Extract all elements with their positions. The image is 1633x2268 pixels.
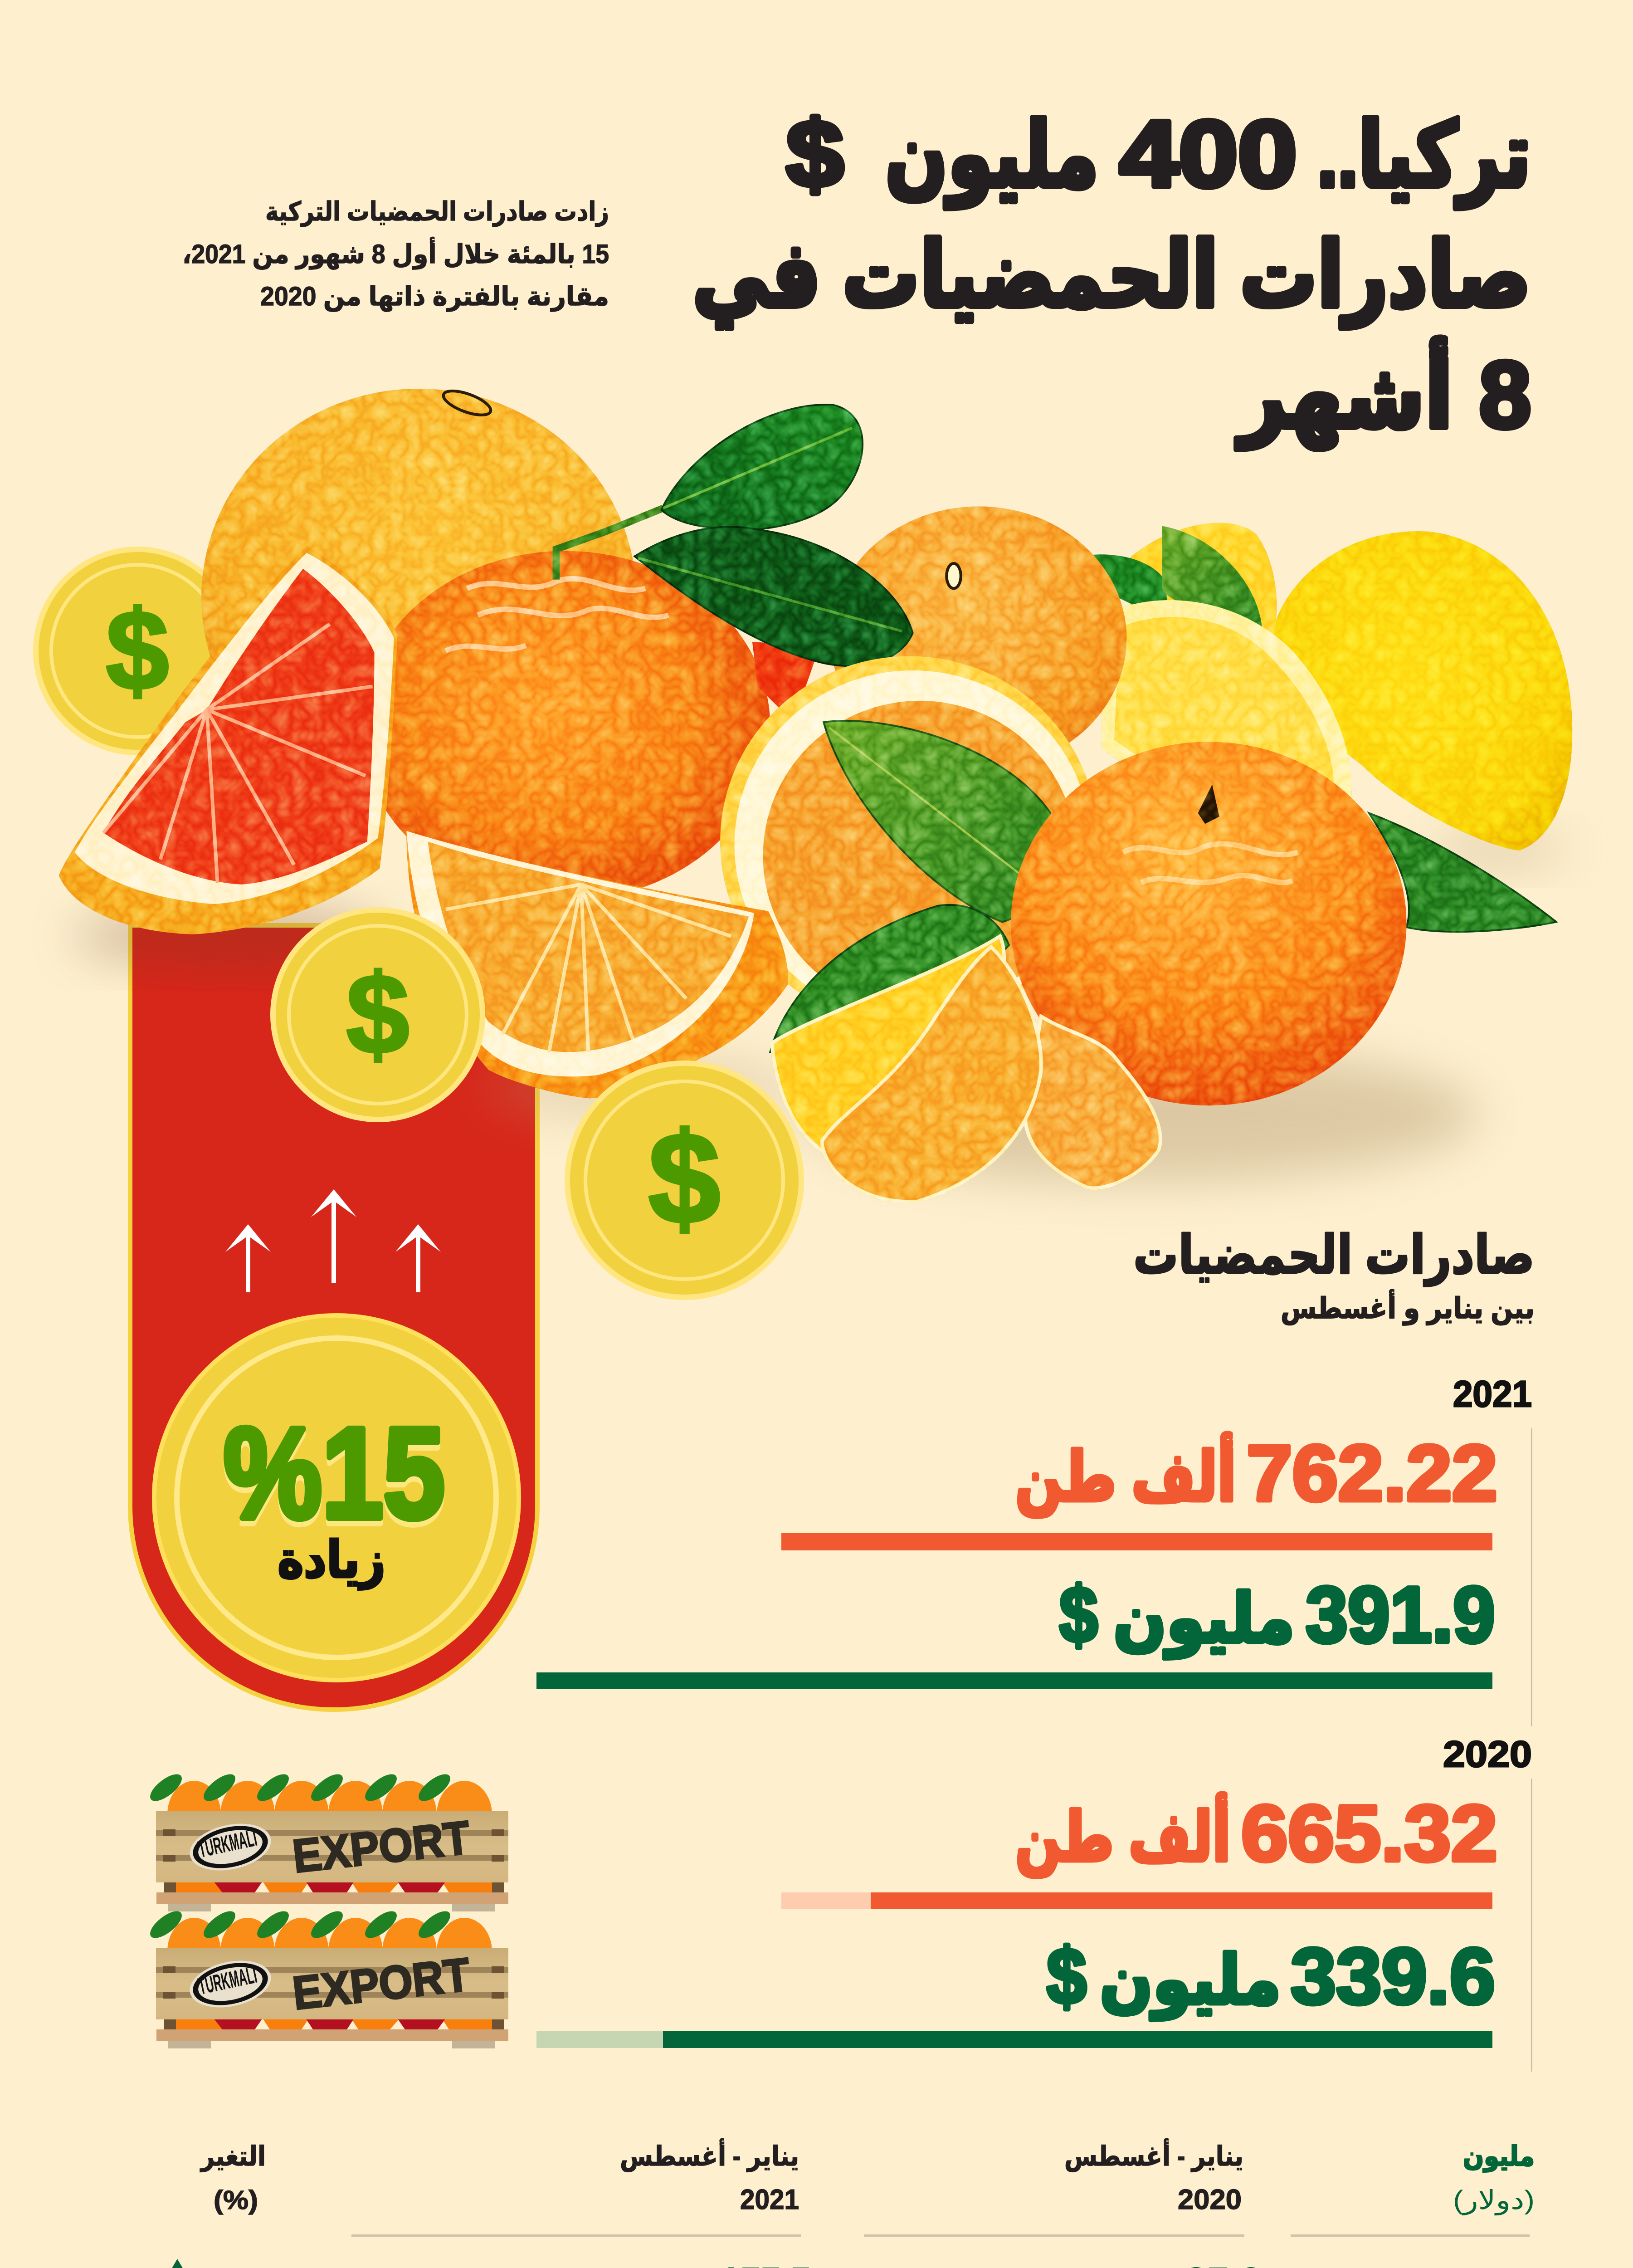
subtitle text block	[182, 197, 609, 312]
panel: 2020 stats: $	[1047, 1932, 1087, 2021]
illustration: citrus fruits	[59, 386, 1572, 1202]
table header: يناير - أغسطس	[1064, 2138, 1243, 2172]
title: مليون	[885, 105, 1099, 209]
icon: coin left	[36, 549, 239, 753]
value bar 2021	[536, 1672, 1492, 1689]
percentage value: %15	[224, 1401, 445, 1545]
tons unit 2021: ألف طن	[1015, 1433, 1236, 1517]
icon: export crate lower: TÜRKMALI	[196, 1962, 259, 2000]
year 2020: 2020	[1443, 1734, 1532, 1775]
row: lemon	[156, 2259, 1530, 2268]
tons bar 2021	[781, 1533, 1492, 1550]
icon: coin lower: $	[648, 1106, 720, 1251]
subtitle text block: ‏15 بالمئة خلال أول 8 شهور من 2021،‏	[182, 237, 609, 270]
arrow middle	[311, 1189, 356, 1283]
big coin: increase	[154, 1315, 519, 1680]
panel: 2021 stats: $	[1059, 1571, 1098, 1659]
fruit: tangerine segment center	[822, 947, 1041, 1202]
increase label: زيادة	[278, 1531, 385, 1589]
icon: export crate upper: EXPORT	[290, 1811, 473, 1882]
leaf: small right	[1162, 526, 1262, 628]
leaf: bottom	[770, 905, 1009, 1052]
leaf: small left	[1073, 554, 1168, 615]
fruit: orange half	[720, 656, 1098, 1027]
title	[692, 102, 1531, 450]
tons value 2020: 665.32	[1241, 1789, 1497, 1878]
fruit: lemon	[1271, 531, 1572, 850]
tons bar 2020	[781, 1892, 1492, 1909]
table header: (دولار)	[1453, 2185, 1535, 2216]
title: 8	[1479, 342, 1531, 448]
table header: (%)	[214, 2185, 258, 2215]
grapefruit stem mark	[440, 386, 493, 420]
fruit: top right orange	[831, 506, 1126, 770]
table header	[200, 2138, 1535, 2237]
icon: coin center	[273, 910, 483, 1119]
table header: 2021	[740, 2184, 799, 2215]
title: تركيا..‏	[1317, 105, 1531, 209]
value 2021: 391.9	[1306, 1571, 1495, 1659]
arrow right	[395, 1224, 441, 1292]
year 2021: 2021	[1453, 1374, 1532, 1415]
icon: coin left: $	[106, 587, 169, 714]
icon: coin center: $	[346, 951, 409, 1077]
icon: coin lower	[567, 1063, 801, 1297]
leaf: right	[1369, 813, 1556, 932]
table header: 2020	[1178, 2184, 1242, 2215]
leaf: center	[824, 721, 1057, 922]
stem	[556, 508, 663, 580]
table header: التغير	[200, 2141, 266, 2172]
title: 400	[1120, 102, 1297, 207]
panel: 2020 stats	[536, 1734, 1532, 2072]
fruit: orange wedge	[406, 831, 788, 1098]
table header: مليون	[1463, 2141, 1535, 2172]
arrows up	[225, 1189, 441, 1292]
panel: 2021 stats	[536, 1374, 1532, 1726]
fruit: lemon half	[1102, 600, 1352, 838]
orange stem mark	[946, 563, 961, 588]
fruit: tangerine segment right	[1025, 1017, 1160, 1188]
arrow left	[225, 1224, 271, 1292]
icon: export crate lower: EXPORT	[290, 1948, 473, 2019]
leaf: top lower	[634, 527, 913, 666]
value bar 2020	[536, 2031, 1492, 2048]
fruit: grapefruit wedge	[59, 546, 398, 934]
section heading: بين يناير و أغسطس	[1281, 1289, 1535, 1325]
value unit 2021: مليون	[1113, 1580, 1295, 1659]
section heading: صادرات الحمضيات	[1133, 1225, 1535, 1286]
table header: يناير - أغسطس	[620, 2138, 799, 2172]
fruit: lemon wedge behind	[1114, 523, 1277, 645]
icon: export crate upper: TÜRKMALI	[196, 1825, 259, 1863]
section heading	[1133, 1225, 1535, 1325]
tons value 2021: 762.22	[1247, 1429, 1497, 1518]
fruit: grapefruit	[201, 389, 636, 806]
red increase banner	[130, 925, 537, 1710]
title: $	[786, 102, 843, 207]
value 2020: 339.6	[1291, 1932, 1495, 2021]
icon: export crate upper	[146, 1769, 508, 1911]
subtitle text block: ‏مقارنة بالفترة ذاتها من 2020‏	[260, 282, 609, 312]
fruit: right orange	[1011, 742, 1407, 1105]
value unit 2020: مليون	[1100, 1942, 1281, 2020]
leaf: top upper	[661, 405, 863, 530]
tons unit 2020: ألف طن	[1015, 1793, 1231, 1877]
subtitle text block: زادت صادرات الحمضيات التركية	[265, 197, 609, 227]
icon: export crate lower	[146, 1906, 508, 2048]
fruit: tangerine segment left	[772, 936, 1004, 1159]
title: أشهر	[1236, 337, 1453, 450]
table: citrus exports by fruit	[156, 2138, 1535, 2268]
fruit: big orange	[360, 551, 770, 900]
